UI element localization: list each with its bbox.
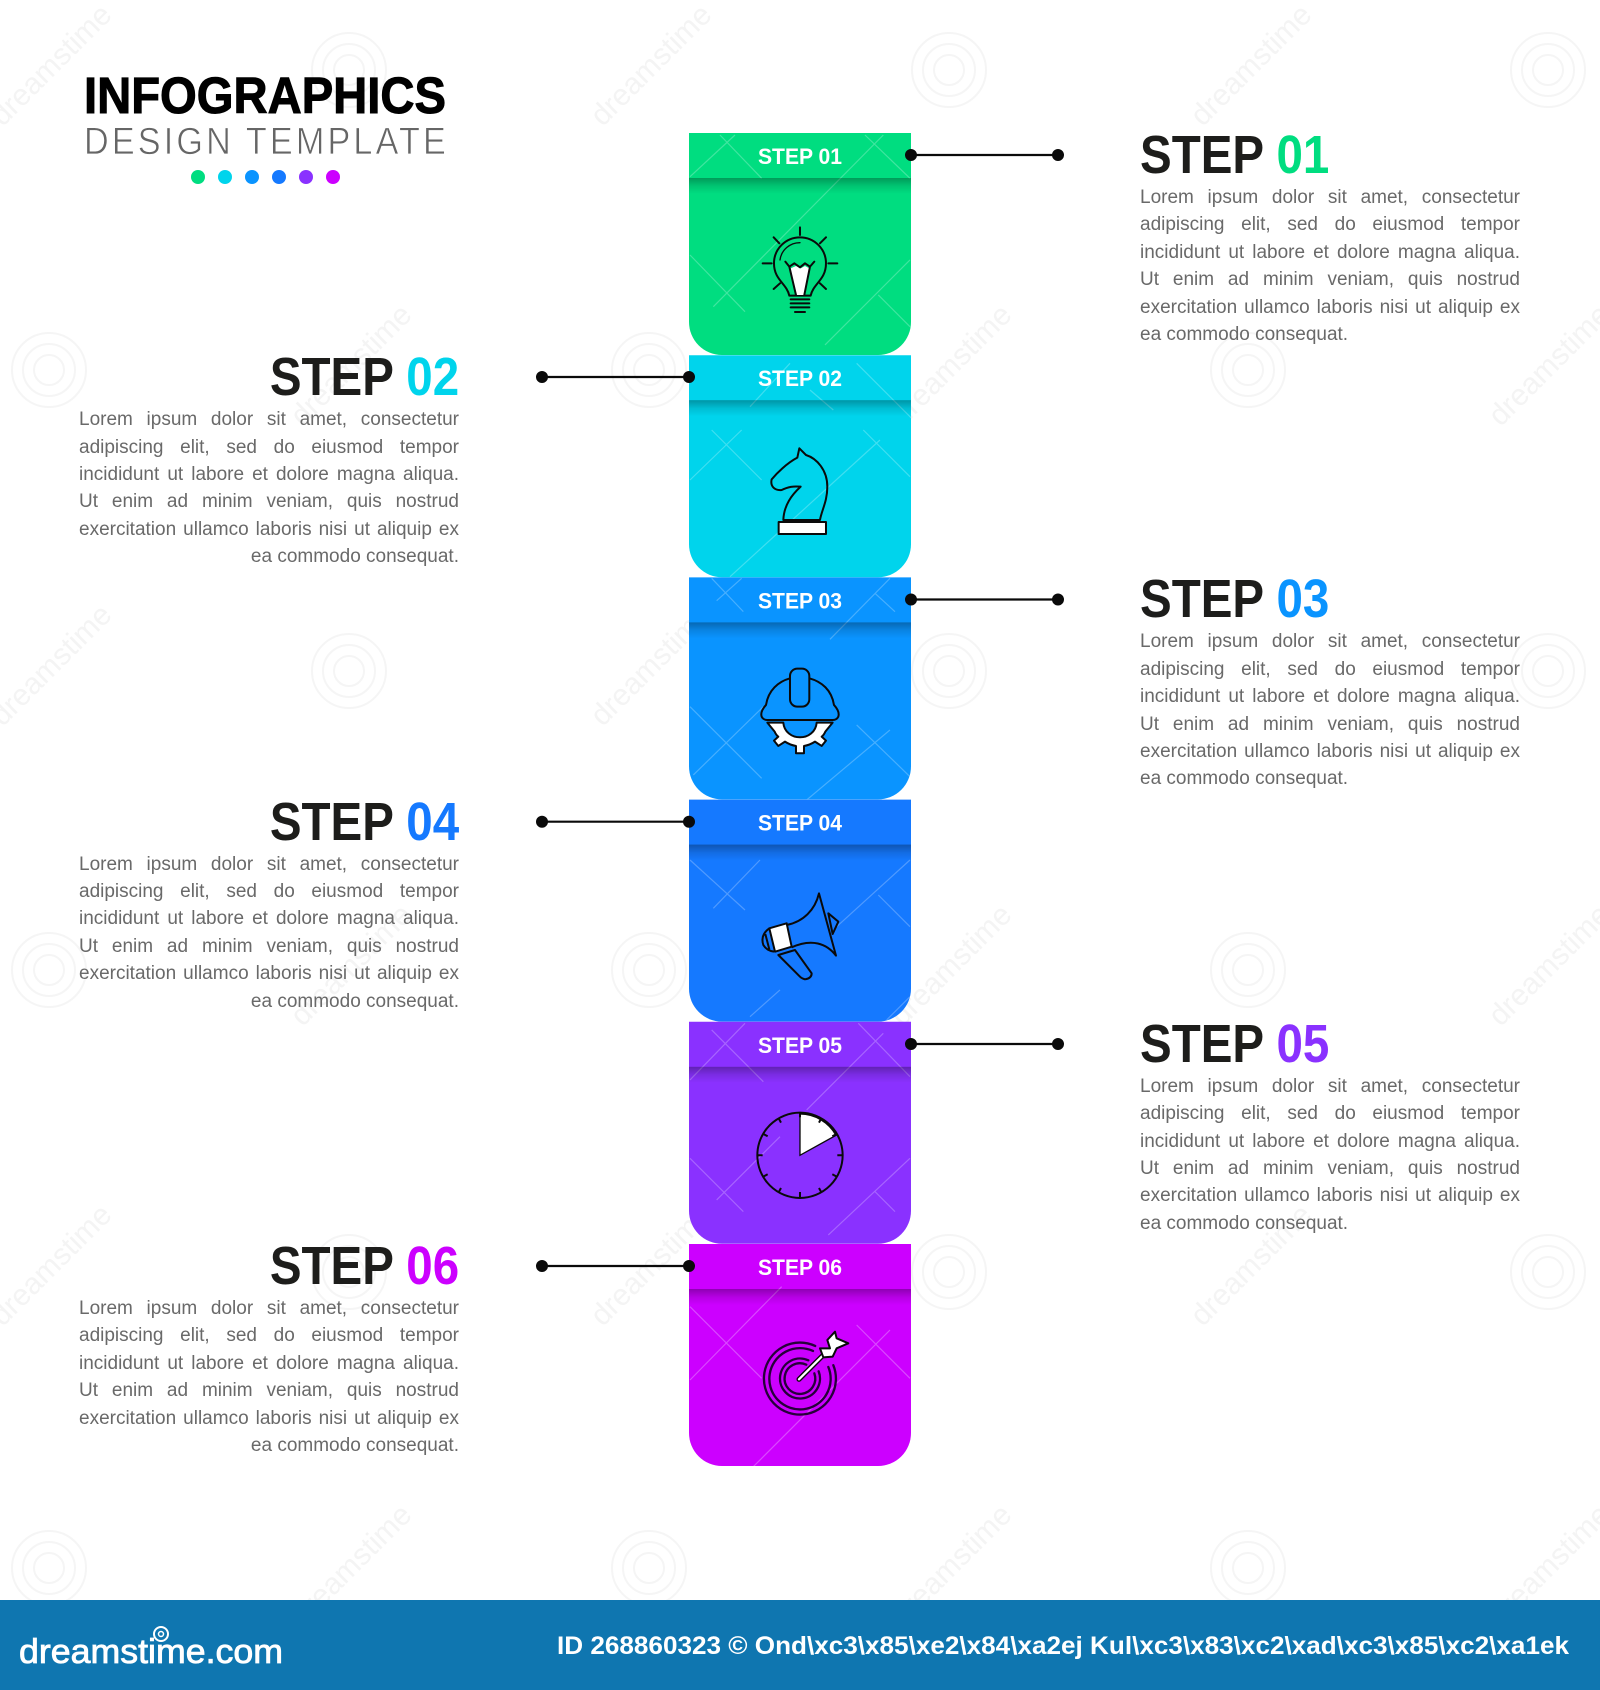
connector: step 02 bbox=[536, 372, 694, 382]
watermark layer: dreamstime bbox=[284, 898, 418, 1032]
connector: step 03 bbox=[906, 594, 1064, 605]
text block: step 05: Lorem ipsum dolor sit amet, consectetur bbox=[1140, 1076, 1520, 1097]
text block: step 06: incididunt ut labore et dolore magna aliqua. bbox=[79, 1353, 459, 1374]
text block: step 03: incididunt ut labore et dolore magna aliqua. bbox=[1140, 686, 1520, 707]
watermark layer: dreamstime bbox=[584, 0, 718, 132]
watermark layer: dreamstime bbox=[884, 898, 1018, 1032]
text block: step 02: STEP 02 bbox=[270, 347, 459, 407]
text block: step 06: ea commodo consequat. bbox=[251, 1435, 459, 1456]
text block: step 03: Lorem ipsum dolor sit amet, consectetur bbox=[1140, 631, 1520, 652]
icon: clock bbox=[757, 1113, 843, 1198]
text block: step 06: exercitation ullamco laboris nisi ut aliquip ex bbox=[79, 1408, 459, 1429]
card: step 06: STEP 06 bbox=[758, 1255, 842, 1280]
text block: step 05: STEP 05 bbox=[1140, 1014, 1329, 1074]
text block: step 04: adipiscing elit, sed do eiusmod tempor bbox=[79, 881, 459, 902]
watermark layer: dreamstime bbox=[1184, 1198, 1318, 1332]
connector: step 04 bbox=[536, 816, 694, 827]
text block: step 06: adipiscing elit, sed do eiusmod tempor bbox=[79, 1325, 459, 1346]
connector: step 05 bbox=[906, 1038, 1064, 1050]
text block: step 04: Lorem ipsum dolor sit amet, consectetur bbox=[79, 854, 459, 875]
text block: step 02: Lorem ipsum dolor sit amet, consectetur bbox=[79, 409, 459, 430]
text block: step 02: adipiscing elit, sed do eiusmod tempor bbox=[79, 437, 459, 458]
text block: step 03: adipiscing elit, sed do eiusmod tempor bbox=[1140, 659, 1520, 680]
watermark layer: dreamstime bbox=[584, 1198, 718, 1332]
card: step 05: STEP 05 bbox=[758, 1033, 842, 1058]
text block: step 01: incididunt ut labore et dolore magna aliqua. bbox=[1140, 242, 1520, 263]
watermark layer: dreamstime bbox=[584, 598, 718, 732]
title: DESIGN TEMPLATE bbox=[84, 119, 446, 162]
text block: step 01: adipiscing elit, sed do eiusmod tempor bbox=[1140, 214, 1520, 235]
watermark layer: dreamstime bbox=[284, 298, 418, 432]
card: step 02: STEP 02 bbox=[758, 366, 842, 391]
text block: step 01: ea commodo consequat. bbox=[1140, 324, 1348, 345]
footer bar: ID 268860323 © Ond\xc3\x85\xe2\x84\xa2ej Kul\xc3\x83\xc2\xad\xc3\x85\xc2\xa1ek bbox=[557, 1632, 1569, 1660]
card: step 03: STEP 03 bbox=[758, 588, 842, 613]
connector: step 06 bbox=[536, 1260, 694, 1272]
text block: step 02: exercitation ullamco laboris nisi ut aliquip ex bbox=[79, 519, 459, 540]
text block: step 06: Ut enim ad minim veniam, quis nostrud bbox=[79, 1380, 459, 1401]
icon: light bulb bbox=[763, 227, 837, 312]
text block: step 05: incididunt ut labore et dolore magna aliqua. bbox=[1140, 1131, 1520, 1152]
text block: step 06: STEP 06 bbox=[270, 1236, 459, 1296]
text block: step 05: exercitation ullamco laboris nisi ut aliquip ex bbox=[1140, 1185, 1520, 1206]
text block: step 03: ea commodo consequat. bbox=[1140, 768, 1348, 789]
footer bar: dreamstime.com bbox=[19, 1633, 283, 1671]
text block: step 05: Ut enim ad minim veniam, quis nostrud bbox=[1140, 1158, 1520, 1179]
text block: step 06: Lorem ipsum dolor sit amet, consectetur bbox=[79, 1298, 459, 1319]
watermark layer: dreamstime bbox=[884, 1498, 1018, 1632]
text block: step 05: adipiscing elit, sed do eiusmod tempor bbox=[1140, 1103, 1520, 1124]
footer bar bbox=[0, 1600, 1600, 1690]
text block: step 02: ea commodo consequat. bbox=[251, 546, 459, 567]
text block: step 04: incididunt ut labore et dolore magna aliqua. bbox=[79, 908, 459, 929]
connector: step 01 bbox=[906, 150, 1064, 160]
text block: step 01: STEP 01 bbox=[1140, 125, 1329, 185]
watermark layer: dreamstime bbox=[884, 298, 1018, 432]
text block: step 04: Ut enim ad minim veniam, quis nostrud bbox=[79, 936, 459, 957]
watermark layer: dreamstime bbox=[1184, 0, 1318, 132]
icon: helmet and gear bbox=[761, 669, 839, 753]
text block: step 01: Lorem ipsum dolor sit amet, consectetur bbox=[1140, 187, 1520, 208]
icon: megaphone bbox=[762, 893, 838, 979]
text block: step 03: exercitation ullamco laboris nisi ut aliquip ex bbox=[1140, 741, 1520, 762]
text block: step 03 bbox=[1140, 569, 1520, 789]
text block: step 04 bbox=[79, 792, 459, 1012]
text block: step 02: incididunt ut labore et dolore magna aliqua. bbox=[79, 464, 459, 485]
card: step 02 bbox=[689, 355, 911, 578]
text block: step 04: ea commodo consequat. bbox=[251, 991, 459, 1012]
card: step 04 bbox=[689, 800, 911, 1022]
title bbox=[84, 67, 446, 162]
card: step 06 bbox=[689, 1244, 911, 1467]
text block: step 01: Ut enim ad minim veniam, quis nostrud bbox=[1140, 269, 1520, 290]
title: INFOGRAPHICS bbox=[84, 67, 446, 124]
watermark layer: dreamstime bbox=[284, 1498, 418, 1632]
card: step 01 bbox=[689, 133, 911, 355]
icon: chess knight bbox=[771, 448, 827, 534]
text block: step 06 bbox=[79, 1236, 459, 1456]
card: step 03 bbox=[689, 577, 911, 800]
text block: step 04: STEP 04 bbox=[270, 792, 459, 852]
text block: step 03: STEP 03 bbox=[1140, 569, 1329, 629]
text block: step 03: Ut enim ad minim veniam, quis nostrud bbox=[1140, 714, 1520, 735]
colour dots bbox=[191, 170, 340, 184]
card: step 04: STEP 04 bbox=[758, 811, 843, 836]
text block: step 05: ea commodo consequat. bbox=[1140, 1213, 1348, 1234]
text block: step 05 bbox=[1140, 1014, 1520, 1234]
text block: step 01 bbox=[1140, 125, 1520, 345]
text block: step 01: exercitation ullamco laboris nisi ut aliquip ex bbox=[1140, 297, 1520, 318]
text block: step 02 bbox=[79, 347, 459, 567]
icon: target with arrow bbox=[764, 1332, 848, 1415]
text block: step 04: exercitation ullamco laboris nisi ut aliquip ex bbox=[79, 963, 459, 984]
text block: step 02: Ut enim ad minim veniam, quis nostrud bbox=[79, 491, 459, 512]
card: step 05 bbox=[689, 1022, 911, 1244]
card: step 01: STEP 01 bbox=[758, 144, 842, 169]
